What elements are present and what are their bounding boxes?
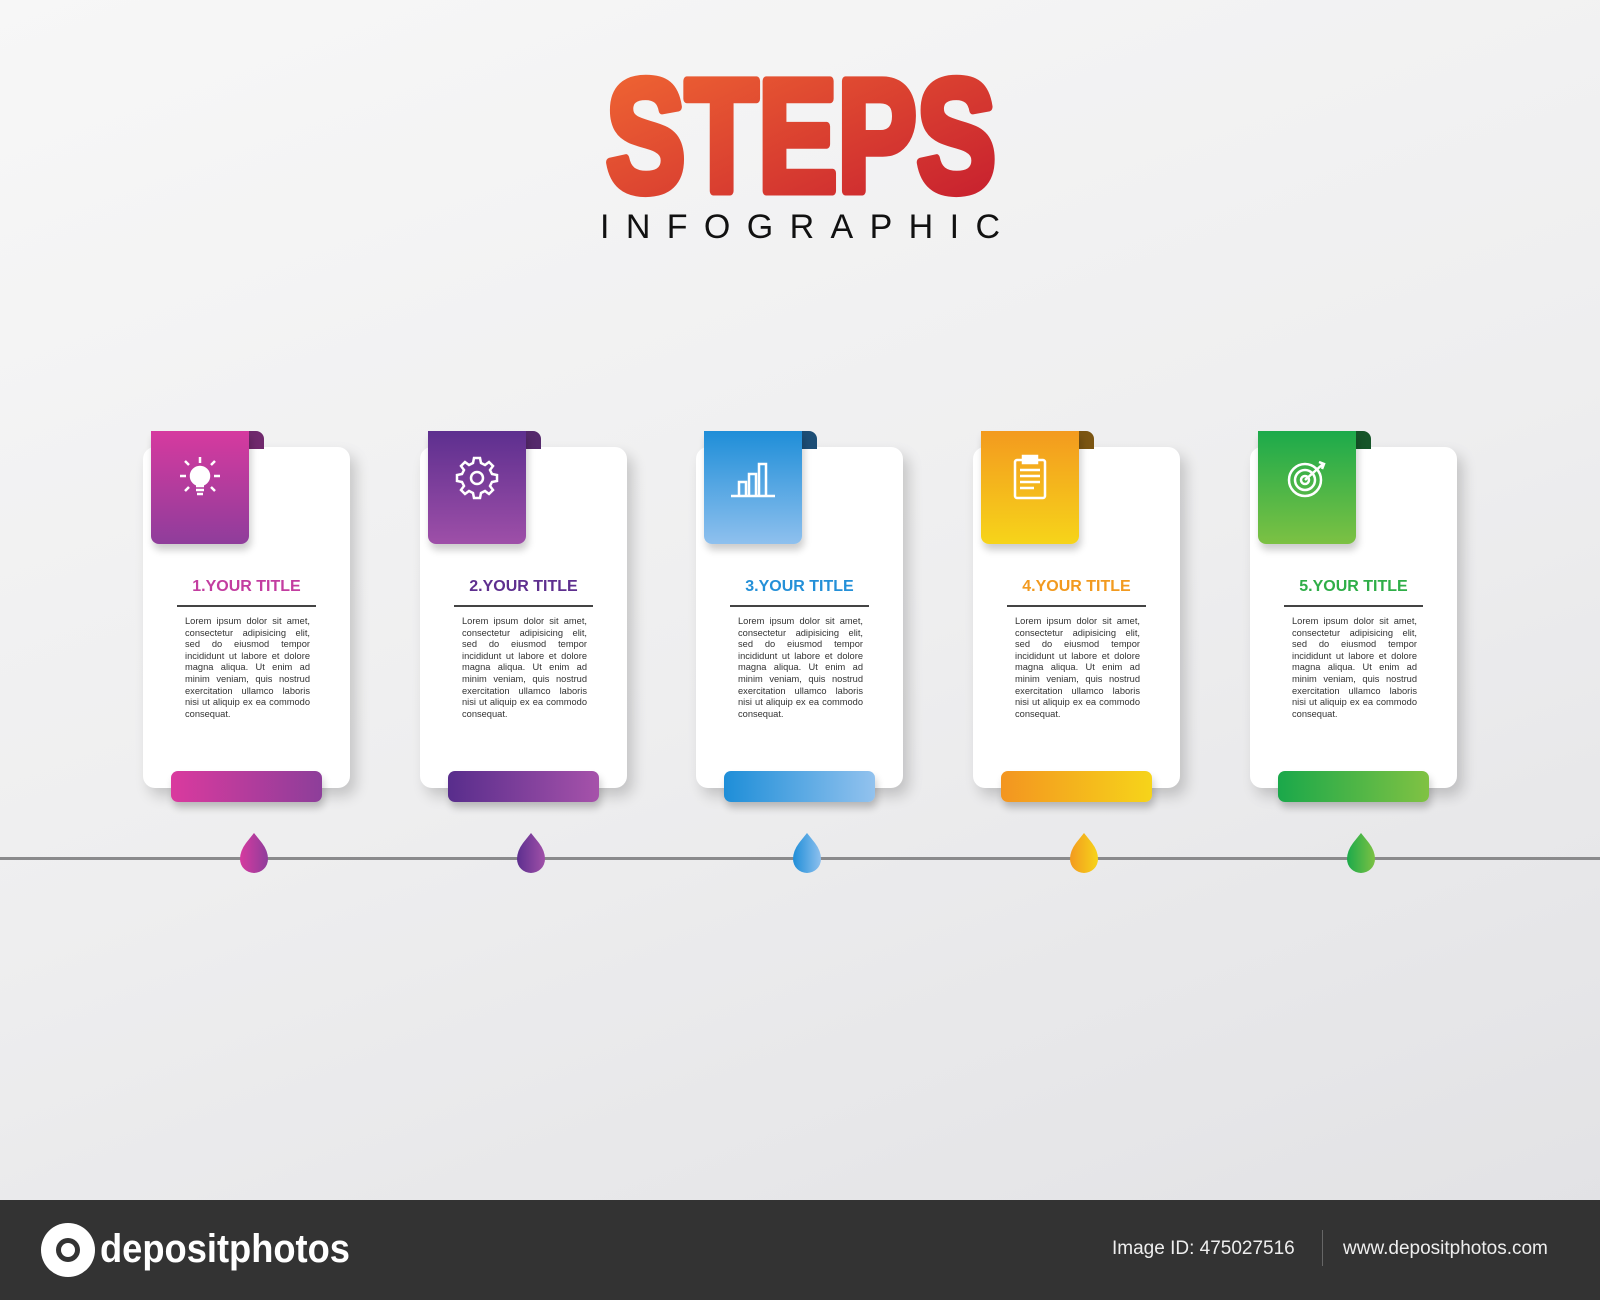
text: Lorem ipsum dolor sit amet, consectetur adipisicing elit, sed do eiusmod tempor incididunt ut labore et dolore magna aliqua. Ut enim ad minim veniam, quis nostrud exercitation ullamco laboris nisi ut aliquip ex ea commodo consequat. (185, 616, 310, 719)
url: www.depositphotos.com (1343, 1238, 1548, 1259)
marker (1347, 833, 1375, 873)
card 3 (696, 431, 915, 873)
logo (41, 1223, 350, 1277)
icon tab: lightbulb (151, 431, 249, 544)
card 2 (420, 431, 639, 873)
marker (1070, 833, 1098, 873)
image id: Image ID: 475027516 (1112, 1238, 1295, 1259)
text: Lorem ipsum dolor sit amet, consectetur adipisicing elit, sed do eiusmod tempor incididunt ut labore et dolore magna aliqua. Ut enim ad minim veniam, quis nostrud exercitation ullamco laboris nisi ut aliquip ex ea commodo consequat. (462, 616, 587, 719)
heading: 5.YOUR TITLE (1299, 578, 1408, 595)
text: Lorem ipsum dolor sit amet, consectetur adipisicing elit, sed do eiusmod tempor incididunt ut labore et dolore magna aliqua. Ut enim ad minim veniam, quis nostrud exercitation ullamco laboris nisi ut aliquip ex ea commodo consequat. (738, 616, 863, 719)
text: Lorem ipsum dolor sit amet, consectetur adipisicing elit, sed do eiusmod tempor incididunt ut labore et dolore magna aliqua. Ut enim ad minim veniam, quis nostrud exercitation ullamco laboris nisi ut aliquip ex ea commodo consequat. (1292, 616, 1417, 719)
timeline (0, 857, 1600, 860)
marker (793, 833, 821, 873)
marker (517, 833, 545, 873)
icon tab: gear (428, 431, 526, 544)
card 4 (973, 431, 1192, 873)
icon tab: bar chart (704, 431, 802, 544)
marker (240, 833, 268, 873)
card 1 (143, 431, 362, 873)
heading: 3.YOUR TITLE (745, 578, 854, 595)
title: INFOGRAPHIC (600, 208, 1000, 246)
heading: 1.YOUR TITLE (192, 578, 301, 595)
text: Lorem ipsum dolor sit amet, consectetur adipisicing elit, sed do eiusmod tempor incididunt ut labore et dolore magna aliqua. Ut enim ad minim veniam, quis nostrud exercitation ullamco laboris nisi ut aliquip ex ea commodo consequat. (1015, 616, 1140, 719)
heading: 2.YOUR TITLE (469, 578, 578, 595)
heading: 4.YOUR TITLE (1022, 578, 1131, 595)
icon tab: clipboard (981, 431, 1079, 544)
card 5 (1250, 431, 1469, 873)
icon tab: target (1258, 431, 1356, 544)
footer (0, 1200, 1600, 1300)
